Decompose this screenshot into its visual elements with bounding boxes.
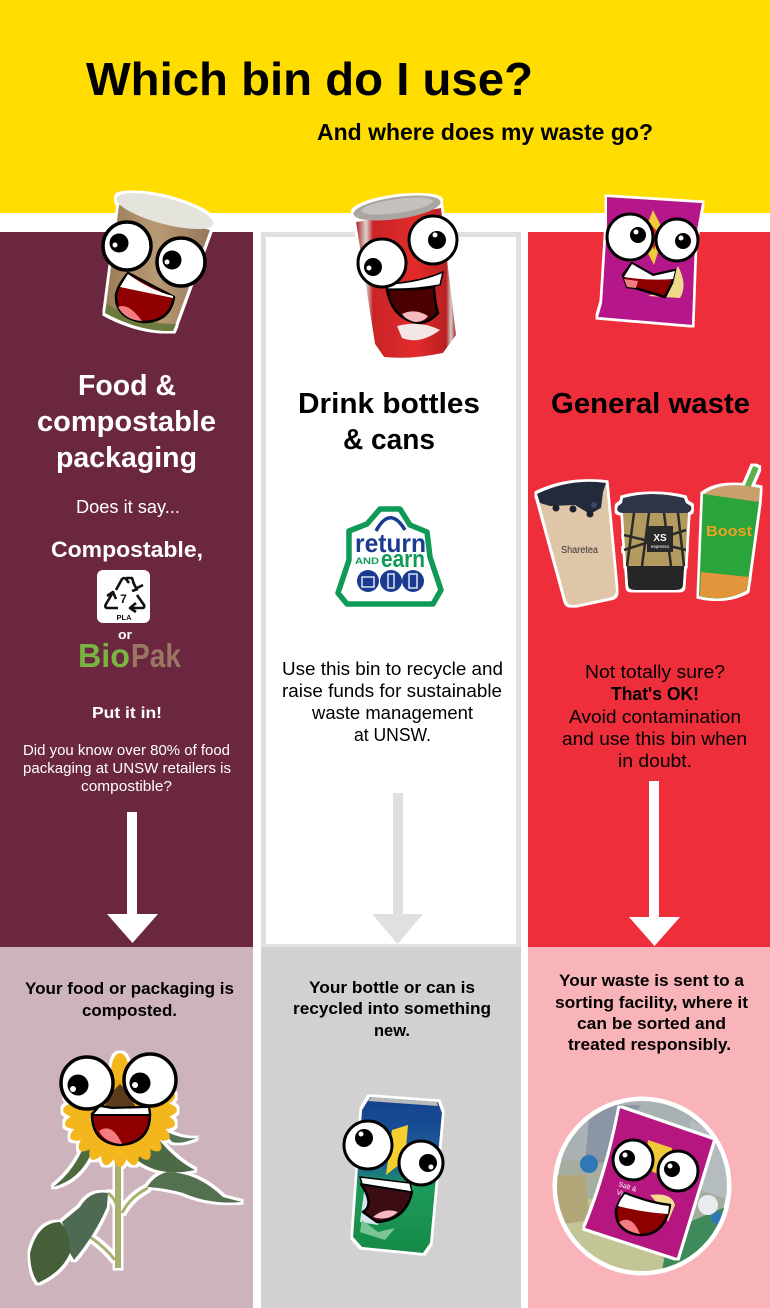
text: not totally sure: and use this bin when bbox=[562, 729, 747, 749]
text: or: or bbox=[118, 627, 132, 642]
text: composted: Your food or packaging is bbox=[25, 979, 234, 998]
icon: XS espresso cup: XS bbox=[653, 533, 667, 544]
text: not totally sure: in doubt. bbox=[618, 751, 692, 771]
icon: return and earn logo: earn bbox=[381, 546, 425, 573]
text: put it in: Put it in! bbox=[92, 705, 162, 722]
text: sorted: can be sorted and bbox=[577, 1014, 726, 1033]
icon: bubble tea cup bbox=[537, 482, 616, 605]
text: use this bin: at UNSW. bbox=[354, 725, 431, 745]
icon: return and earn logo: AND bbox=[355, 556, 379, 567]
panel: recycled outcome bbox=[261, 947, 521, 1308]
panel: composted outcome bbox=[0, 947, 253, 1308]
header band bbox=[0, 0, 770, 213]
can mouth bbox=[387, 272, 443, 323]
subtitle: And where does my waste go? bbox=[317, 119, 653, 145]
packet mouth bbox=[623, 263, 675, 297]
sunflower plant sticker bbox=[30, 1053, 242, 1283]
icon: BioPak logo: Pak bbox=[131, 637, 182, 674]
text: sorted bbox=[555, 971, 748, 1054]
icon: bubble tea cup: Sharetea bbox=[561, 545, 598, 556]
chip packet in circle: Vinegar bbox=[615, 1189, 641, 1204]
text: not totally sure bbox=[562, 662, 747, 771]
text: use this bin bbox=[282, 659, 503, 745]
chip packet eyes bbox=[613, 1140, 698, 1191]
illustration: smiling soft drink can bbox=[344, 1097, 443, 1253]
text: sorted: Your waste is sent to a bbox=[559, 971, 745, 990]
text: use this bin: raise funds for sustainable bbox=[282, 681, 502, 701]
text: use this bin: waste management bbox=[311, 703, 473, 723]
text: did you know: Did you know over 80% of food bbox=[23, 742, 230, 759]
icon: XS espresso cup: espresso bbox=[651, 544, 670, 549]
text: recycled: new. bbox=[374, 1021, 410, 1040]
title: Which bin do I use? bbox=[86, 53, 533, 105]
icon: XS espresso cup bbox=[617, 494, 691, 590]
panel: food and compostable packaging bbox=[0, 232, 253, 947]
text: did you know bbox=[23, 742, 231, 795]
text: recycled: recycled into something bbox=[293, 999, 491, 1018]
packet eyes bbox=[607, 214, 698, 261]
icon: return and earn logo: return bbox=[355, 528, 426, 558]
heading: food and compostable packaging bbox=[37, 370, 216, 474]
icon: recycling code 7 PLA bbox=[97, 570, 150, 623]
heading: drink bottles and cans: Drink bottles bbox=[298, 388, 480, 420]
chip packet in circle: Salt & bbox=[617, 1181, 638, 1194]
heading: food and compostable packaging: compostable bbox=[37, 406, 216, 438]
text: not totally sure: That's OK! bbox=[611, 684, 699, 704]
icon: BioPak logo: Bio bbox=[78, 637, 130, 674]
text: recycled bbox=[293, 978, 491, 1040]
chip packet mouth bbox=[616, 1193, 670, 1235]
icon: BioPak logo bbox=[78, 637, 182, 674]
heading: general waste: General waste bbox=[551, 388, 750, 420]
text: sorted: sorting facility, where it bbox=[555, 993, 748, 1012]
cup mouth bbox=[116, 273, 174, 322]
text: did you know: compostible? bbox=[81, 778, 172, 795]
heading: food and compostable packaging: packaging bbox=[56, 442, 197, 474]
text: composted bbox=[25, 979, 234, 1020]
text: did you know: packaging at UNSW retailers is bbox=[23, 760, 231, 777]
icon: recycling code 7 PLA: 7 bbox=[120, 592, 127, 606]
character: coffee cup bbox=[103, 186, 217, 331]
illustration: plastic waste circle bbox=[555, 1099, 730, 1280]
heading: drink bottles and cans bbox=[298, 388, 480, 456]
icon: Boost juice cup: Boost bbox=[706, 523, 752, 540]
text: recycled: Your bottle or can is bbox=[309, 978, 475, 997]
character: cola can bbox=[352, 191, 457, 358]
heading: drink bottles and cans: & cans bbox=[343, 424, 435, 456]
text: composted: composted. bbox=[82, 1001, 177, 1020]
text: use this bin: Use this bin to recycle and bbox=[282, 659, 503, 679]
panel: drink bottles and cans bbox=[264, 234, 518, 946]
text: compostable: Compostable, bbox=[51, 537, 203, 562]
soft drink can mouth bbox=[360, 1177, 412, 1222]
text: does it say: Does it say... bbox=[76, 497, 180, 517]
heading: food and compostable packaging: Food & bbox=[78, 370, 176, 402]
character: chip packet bbox=[598, 197, 702, 325]
arrow: general waste down bbox=[629, 781, 680, 946]
illustration: smiling sunflower bbox=[30, 1053, 242, 1283]
panel: sorted outcome bbox=[528, 947, 770, 1308]
icon: recycling code 7 PLA: PLA bbox=[116, 613, 132, 622]
icon: return and earn logo bbox=[338, 509, 441, 604]
sunflower eyes bbox=[61, 1054, 176, 1109]
illustration: three takeaway drinks bbox=[537, 467, 760, 605]
sunflower mouth bbox=[92, 1106, 150, 1145]
sunflower petals bbox=[63, 1053, 177, 1167]
arrow: food down bbox=[107, 812, 158, 943]
arrow: drinks down bbox=[372, 793, 423, 944]
text: sorted: treated responsibly. bbox=[568, 1035, 731, 1054]
panel: general waste bbox=[528, 232, 770, 947]
cup eyes bbox=[103, 222, 205, 286]
text: not totally sure: Not totally sure? bbox=[585, 662, 725, 682]
chip packet in circle bbox=[585, 1108, 713, 1258]
can eyes bbox=[358, 216, 457, 287]
icon: Boost juice cup bbox=[699, 467, 760, 598]
soft drink can eyes bbox=[344, 1121, 443, 1185]
text: not totally sure: Avoid contamination bbox=[569, 707, 741, 727]
